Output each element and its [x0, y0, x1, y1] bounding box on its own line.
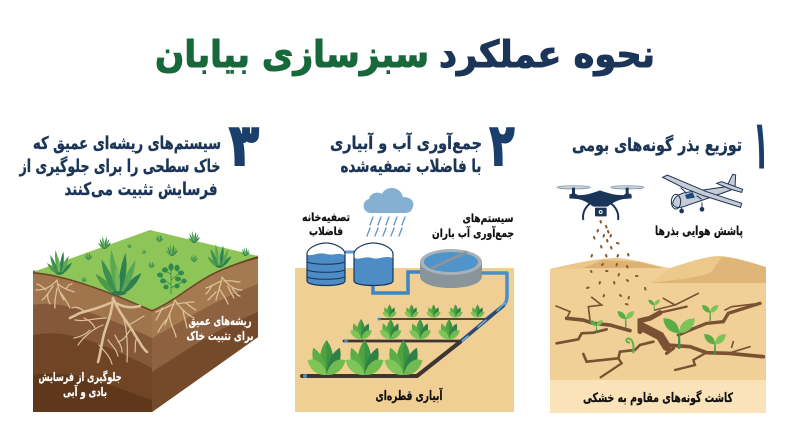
title: سبزسازی بیابان [155, 33, 429, 76]
label: aerial seeding: پاشش هوایی بذرها [655, 223, 743, 238]
roots [36, 277, 242, 364]
soil block illustration: بادی و آبی [63, 384, 107, 400]
pipes between tanks [345, 252, 363, 262]
soil block illustration [33, 230, 258, 412]
panel: step 2 water harvesting: آبیاری قطره‌ای [376, 387, 443, 404]
heading: step 3 [19, 111, 259, 200]
icon: rain cloud [364, 188, 413, 236]
footer band [550, 380, 766, 413]
title: نحوه عملکرد [439, 33, 655, 76]
desert scene [550, 256, 766, 382]
ground cracks [556, 293, 763, 377]
heading: step 2: با فاضلاب تصفیه‌شده [340, 157, 482, 177]
soil block illustration: برای تثبیت خاک [186, 329, 254, 343]
soil labels: ریشه‌های عمیق [188, 314, 252, 328]
seeds falling [587, 221, 646, 304]
heading: step 3: خاک سطحی را برای جلوگیری از [19, 156, 221, 177]
soil block illustration: جلوگیری از فرسایش [38, 370, 122, 385]
heading: step 2: جمع‌آوری آب و آبیاری [330, 131, 482, 154]
heading: step 2 [330, 111, 514, 179]
title [155, 33, 655, 76]
bush [157, 264, 186, 294]
ground surface [33, 230, 258, 310]
heading: step 2: ۲ [490, 111, 514, 179]
icon: right tank [354, 243, 393, 286]
icon: plane [663, 174, 743, 213]
panel: step 2 water harvesting: سیستم‌های [462, 211, 514, 225]
panel: step 1 seed distribution [550, 111, 766, 413]
sand background [295, 268, 514, 412]
text: ۱ [756, 111, 766, 179]
panel: step 2 water harvesting: جمع‌آوری آب باران [432, 226, 514, 241]
footer band: کاشت گونه‌های مقاوم به خشکی [583, 390, 733, 406]
icon: drone [557, 186, 644, 220]
heading: step 3: ۳ [229, 111, 259, 179]
panel: step 3 deep roots [19, 111, 259, 412]
heading: step 3: سیستم‌های ریشه‌ای عمیق که [33, 134, 221, 154]
icon: rainwater basin [420, 249, 482, 288]
drip plants [308, 304, 485, 375]
heading: step 1: توزیع بذر گونه‌های بومی [572, 134, 742, 156]
panel: step 2 water harvesting [295, 111, 514, 412]
drip pipes [302, 273, 507, 376]
heading: step 1 [572, 111, 766, 179]
plants on ground [47, 231, 250, 296]
panel: step 2 water harvesting: فاضلاب [309, 224, 343, 238]
labels: تصفیه‌خانه [302, 210, 350, 224]
icon: left tank [307, 243, 345, 286]
pipe end caps [303, 318, 380, 378]
ground edge shadow [33, 257, 258, 310]
heading: step 3: فرسایش تثبیت می‌کنند [64, 180, 218, 200]
seedlings [590, 300, 726, 355]
